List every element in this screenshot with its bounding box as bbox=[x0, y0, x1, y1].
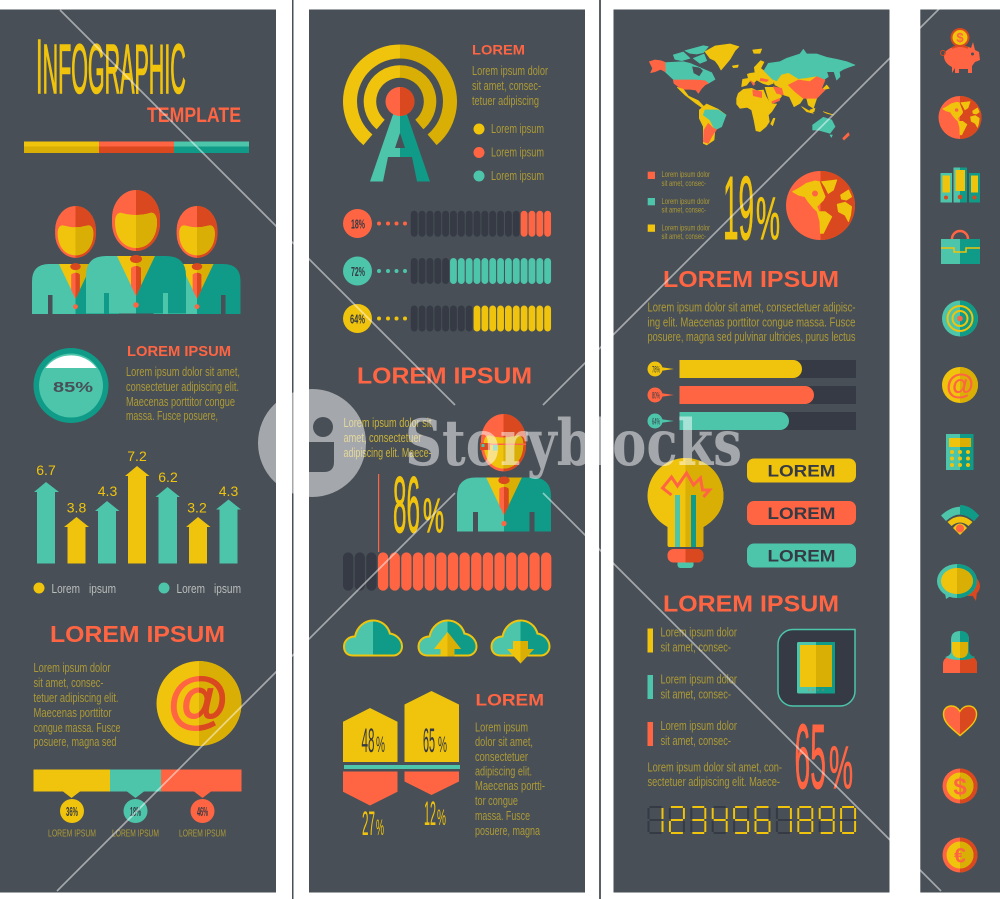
horizontal bars: 78% bbox=[652, 364, 660, 374]
text block: tetuer adipiscing elit. bbox=[34, 690, 118, 705]
tricolour bar bbox=[24, 142, 249, 153]
button: LOREM bbox=[768, 504, 836, 523]
arrow bar chart: 4.3 bbox=[219, 483, 238, 499]
icon: businessman with glasses bbox=[457, 414, 551, 532]
progress row: 72%: 72% bbox=[351, 264, 365, 279]
text block: Lorem ipsum dolor sit amet, con- bbox=[648, 760, 782, 775]
map legend: Lorem ipsum dolor bbox=[662, 169, 710, 179]
horizontal bars bbox=[648, 360, 856, 430]
chart legend: Lorem bbox=[52, 581, 80, 596]
heading: LOREM bbox=[476, 691, 544, 710]
map legend: Lorem ipsum dolor bbox=[662, 222, 710, 232]
chart: pentagons: 65 bbox=[423, 722, 435, 760]
panel: icon strip bbox=[920, 10, 1000, 892]
progress row: 64%: 64% bbox=[350, 312, 365, 326]
panel: right column: % bbox=[756, 185, 780, 252]
panel: left column bbox=[0, 10, 276, 892]
legend bbox=[474, 121, 544, 183]
progress row: 18%: 18% bbox=[351, 216, 365, 232]
text block: sectetuer adipiscing elit. Maece- bbox=[648, 774, 780, 789]
gauge: 85%: 85% bbox=[53, 379, 93, 396]
icon: euro coin: € bbox=[954, 844, 966, 868]
icon: at sign circle bbox=[156, 661, 242, 746]
icon: at sign circle: @ bbox=[168, 666, 228, 734]
icon: woman bbox=[943, 631, 977, 673]
text block bbox=[126, 364, 240, 423]
stacked bar: 18% bbox=[130, 804, 141, 819]
text block: Maecenas porttitor bbox=[34, 705, 112, 720]
icon: piggy bank bbox=[940, 28, 980, 73]
icon: cloud upload bbox=[418, 620, 476, 656]
list: sit amet, consec- bbox=[660, 640, 731, 655]
text block bbox=[344, 415, 432, 460]
legend: Lorem ipsum bbox=[491, 121, 544, 136]
icon: light bulb bbox=[648, 458, 724, 568]
world map bbox=[649, 44, 855, 145]
chart legend: Lorem bbox=[176, 581, 205, 596]
arrow bar chart: 6.2 bbox=[158, 469, 178, 485]
list: Lorem ipsum dolor bbox=[660, 718, 737, 733]
text block: adipiscing elit. Maece- bbox=[344, 445, 432, 460]
arrow bar chart: 3.2 bbox=[187, 500, 207, 516]
icon: speech bubbles bbox=[937, 564, 980, 601]
stacked bar bbox=[34, 770, 242, 840]
panel: right column bbox=[614, 10, 890, 892]
chart: pentagons: % bbox=[437, 805, 446, 830]
heading: LOREM IPSUM bbox=[50, 621, 225, 647]
heading: LOREM IPSUM bbox=[127, 343, 231, 360]
button: LOREM bbox=[768, 462, 836, 480]
icon: binders bbox=[940, 168, 980, 202]
stacked bar: 46% bbox=[197, 804, 208, 819]
text block: Lorem ipsum dolor sit amet, consectetuer adipisc- bbox=[648, 300, 856, 315]
heading: LOREM IPSUM bbox=[663, 591, 839, 617]
icon: at sign bbox=[942, 367, 978, 403]
map legend: sit amet, consec- bbox=[662, 178, 706, 188]
text block: dolor sit amet, bbox=[475, 734, 533, 749]
button bbox=[747, 544, 856, 568]
text block: massa. Fusce bbox=[475, 808, 530, 823]
chart: pentagons: 12 bbox=[424, 795, 436, 833]
icon: globe bbox=[786, 171, 855, 240]
subtitle: TEMPLATE bbox=[147, 104, 241, 127]
text block bbox=[475, 720, 545, 838]
watermark: Storyblocks bbox=[405, 406, 742, 481]
progress row: 72% bbox=[343, 256, 548, 286]
icon: at sign: @ bbox=[946, 369, 974, 401]
arrow bar chart: 6.7 bbox=[36, 462, 56, 478]
chart: pentagons bbox=[343, 691, 460, 843]
text block: amet, consectetuer bbox=[344, 430, 422, 445]
title: INFOGRAPHIC bbox=[36, 24, 186, 111]
arrow bar chart: 4.3 bbox=[98, 483, 117, 499]
icon: dollar coin: $ bbox=[953, 774, 967, 800]
text block: Lorem ipsum dolor sit amet, bbox=[126, 364, 240, 379]
stat: 65%: 65 bbox=[794, 706, 826, 808]
text block: posuere, magna sed pulvinar ultricies, purus lectus bbox=[648, 329, 856, 344]
text block: consectetuer bbox=[475, 749, 528, 764]
icon: globe bbox=[938, 96, 982, 139]
list: Lorem ipsum dolor bbox=[660, 671, 737, 686]
icon: cloud download bbox=[492, 620, 550, 664]
icon: at sign circle: @ bbox=[168, 666, 228, 734]
heading: LOREM IPSUM bbox=[357, 362, 532, 388]
icon: broadcast antenna bbox=[350, 52, 450, 182]
stacked bar: LOREM IPSUM bbox=[112, 828, 159, 840]
list: sit amet, consec- bbox=[660, 733, 731, 748]
text block: adipiscing elit. bbox=[475, 764, 532, 778]
progress row: 64% bbox=[343, 304, 548, 333]
list: Lorem ipsum dolor bbox=[660, 625, 737, 640]
text block: tetuer adipiscing bbox=[472, 93, 539, 108]
button bbox=[747, 501, 856, 525]
text block: posuere, magna bbox=[475, 823, 541, 838]
icon: target bbox=[942, 300, 978, 336]
text block: Lorem ipsum dolor bbox=[472, 63, 548, 78]
text block: Maecenas porttitor congue bbox=[126, 394, 235, 409]
text block: consectetuer adipiscing elit. bbox=[126, 379, 239, 394]
digital digits bbox=[648, 806, 856, 834]
legend: Lorem ipsum bbox=[491, 144, 544, 160]
icon: piggy bank: $ bbox=[956, 30, 964, 45]
icon: euro coin bbox=[942, 838, 978, 872]
chart: pentagons: % bbox=[376, 732, 385, 757]
map legend bbox=[648, 169, 710, 241]
icon: three business people bbox=[32, 190, 240, 314]
panel: right column: % bbox=[829, 734, 853, 801]
button bbox=[747, 458, 856, 482]
text block: ing elit. Maecenas porttitor congue massa. Fusce bbox=[648, 314, 856, 330]
stacked bar: LOREM IPSUM bbox=[48, 828, 96, 840]
horizontal bars: 64% bbox=[652, 416, 660, 426]
map legend: sit amet, consec- bbox=[662, 231, 706, 241]
marker line bbox=[378, 474, 379, 552]
list: sit amet, consec- bbox=[660, 686, 731, 701]
panel: centre column bbox=[309, 10, 585, 892]
legend: Lorem ipsum bbox=[491, 168, 544, 183]
heading: LOREM bbox=[472, 42, 525, 58]
text block: congue massa. Fusce bbox=[34, 720, 120, 735]
text block bbox=[472, 63, 548, 108]
stacked bar: 36% bbox=[66, 804, 78, 819]
list bbox=[648, 625, 737, 748]
chart: pentagons: 27 bbox=[362, 805, 375, 843]
icon: cloud bbox=[344, 620, 402, 656]
map legend: sit amet, consec- bbox=[662, 204, 706, 214]
arrow bar chart: 7.2 bbox=[127, 448, 147, 464]
large progress bar bbox=[348, 558, 546, 586]
panel: centre column: % bbox=[423, 490, 444, 543]
chart: pentagons: 48 bbox=[362, 722, 374, 760]
stat: 86%: 86 bbox=[393, 460, 420, 549]
gauge: 85% bbox=[34, 348, 108, 423]
icon: dollar coin bbox=[942, 768, 978, 804]
chart legend: ipsum bbox=[214, 581, 241, 596]
chart: pentagons: % bbox=[376, 815, 384, 840]
icon: briefcase bbox=[941, 231, 980, 264]
icon: calculator bbox=[946, 434, 974, 470]
button: LOREM bbox=[768, 546, 836, 566]
text block: sit amet, consec- bbox=[472, 78, 541, 93]
text block: tor congue bbox=[475, 793, 518, 808]
icon: heart bbox=[944, 706, 976, 736]
chart legend bbox=[34, 581, 241, 596]
stacked bar: LOREM IPSUM bbox=[179, 828, 226, 840]
text block bbox=[34, 660, 120, 749]
stat: 19%: 19 bbox=[723, 159, 754, 259]
text block: sit amet, consec- bbox=[34, 675, 104, 690]
map legend: Lorem ipsum dolor bbox=[662, 196, 710, 206]
arrow bar chart: 3.8 bbox=[67, 500, 86, 516]
text block: Lorem ipsum bbox=[475, 720, 528, 734]
text block bbox=[648, 300, 856, 344]
text block: Lorem ipsum dolor bbox=[34, 660, 111, 675]
text block: massa. Fusce posuere, bbox=[126, 408, 218, 423]
progress row: 18% bbox=[343, 209, 548, 238]
text block: Maecenas portti- bbox=[475, 778, 545, 793]
chart legend: ipsum bbox=[89, 581, 116, 596]
text block: Lorem ipsum dolor sit bbox=[344, 415, 432, 430]
chart: pentagons: % bbox=[438, 732, 447, 757]
icon: wifi bbox=[941, 505, 979, 535]
column dividers bbox=[292, 0, 601, 899]
horizontal bars: 80% bbox=[652, 390, 660, 400]
heading: LOREM IPSUM bbox=[663, 266, 839, 292]
text block: posuere, magna sed bbox=[34, 734, 116, 749]
text block bbox=[648, 760, 782, 789]
icon: tablet bbox=[778, 630, 855, 706]
arrow bar chart bbox=[34, 448, 241, 564]
